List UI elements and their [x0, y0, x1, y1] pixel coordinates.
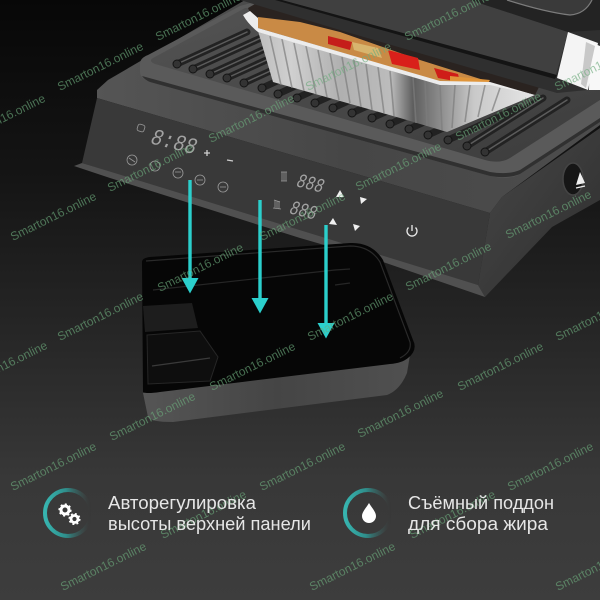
- timer display: 8:88: [146, 126, 201, 161]
- ring icon with drop: [345, 490, 391, 536]
- upper temperature display: 888: [292, 171, 328, 199]
- ring icon with gears: [45, 490, 91, 536]
- watermarks: Smarton16.online: [307, 539, 398, 594]
- drip tray: [142, 243, 415, 422]
- watermarks: Smarton16.online: [107, 389, 198, 444]
- feature: auto height adjustment: высоты верхней панели: [108, 514, 311, 534]
- grill control panel face: [82, 98, 490, 285]
- watermarks: Smarton16.online: [353, 139, 444, 194]
- watermarks: Smarton16.online: [207, 339, 298, 394]
- upper lid: [240, 0, 600, 93]
- grill ribs: [173, 32, 567, 156]
- caption: Съёмный поддон: [408, 493, 554, 513]
- watermarks: Smarton16.online: [206, 91, 297, 146]
- steel handle: [557, 32, 600, 90]
- heat icons: [281, 172, 287, 181]
- watermarks: Smarton16.online: [503, 187, 594, 242]
- watermarks: Smarton16.online: [8, 189, 99, 244]
- caption: Авторегулировка: [108, 493, 257, 513]
- foil tray with food: [243, 0, 540, 132]
- power button: [407, 225, 417, 236]
- foil corrugation: [270, 36, 500, 130]
- grill right side face: [478, 128, 600, 297]
- mode icons: [127, 155, 228, 192]
- arrow three: [318, 225, 334, 338]
- watermarks: Smarton16.online: [455, 339, 546, 394]
- arrow one: [182, 180, 198, 294]
- food: [248, 0, 540, 95]
- tray body: [142, 243, 415, 393]
- arrows: [182, 180, 334, 338]
- tray rim highlight: [146, 246, 410, 358]
- watermarks: Smarton16.online: [257, 189, 348, 244]
- watermarks: Smarton16.online: [407, 487, 498, 542]
- panel lower bevel: [74, 163, 485, 297]
- feature: removable grease tray: [345, 490, 554, 536]
- watermarks: Smarton16.online: [505, 439, 596, 494]
- watermarks: Smarton16.online: [105, 140, 196, 195]
- lower temperature display: 888: [285, 198, 321, 226]
- tray compartment upper: [143, 303, 198, 332]
- watermarks: Smarton16.online: [158, 487, 249, 542]
- watermarks: Smarton16.online: [303, 39, 394, 94]
- feature: auto height adjustment: [45, 490, 311, 536]
- watermarks: Smarton16.online: [8, 439, 99, 494]
- watermarks: Smarton16.online: [58, 539, 149, 594]
- watermarks: Smarton16.online: [355, 386, 446, 441]
- plus and minus buttons: [204, 150, 233, 161]
- watermarks: Smarton16.online: [55, 39, 146, 94]
- grill body top band: [97, 0, 600, 213]
- tray front wall: [143, 355, 410, 422]
- grill appliance: [74, 0, 600, 297]
- watermarks: Smarton16.online: [257, 439, 348, 494]
- watermarks: Smarton16.online: [155, 240, 246, 295]
- foil rim: [243, 11, 535, 95]
- feature: removable grease tray: для сбора жира: [408, 514, 549, 534]
- foil wall: [258, 31, 535, 132]
- side knob: [563, 163, 585, 195]
- tray back ledge: [153, 269, 350, 290]
- arrow two: [252, 200, 268, 314]
- tray compartment lower: [147, 331, 218, 384]
- timer icon: [137, 124, 145, 132]
- arrow buttons: [329, 190, 367, 231]
- watermarks: Smarton16.online: [305, 289, 396, 344]
- watermarks: Smarton16.online: [453, 89, 544, 144]
- watermarks: Smarton16.online: [55, 289, 146, 344]
- watermarks: Smarton16.online: [403, 239, 494, 294]
- control panel icons: [127, 124, 287, 209]
- tray inner highlights: [152, 358, 210, 366]
- grill plate: [140, 0, 600, 178]
